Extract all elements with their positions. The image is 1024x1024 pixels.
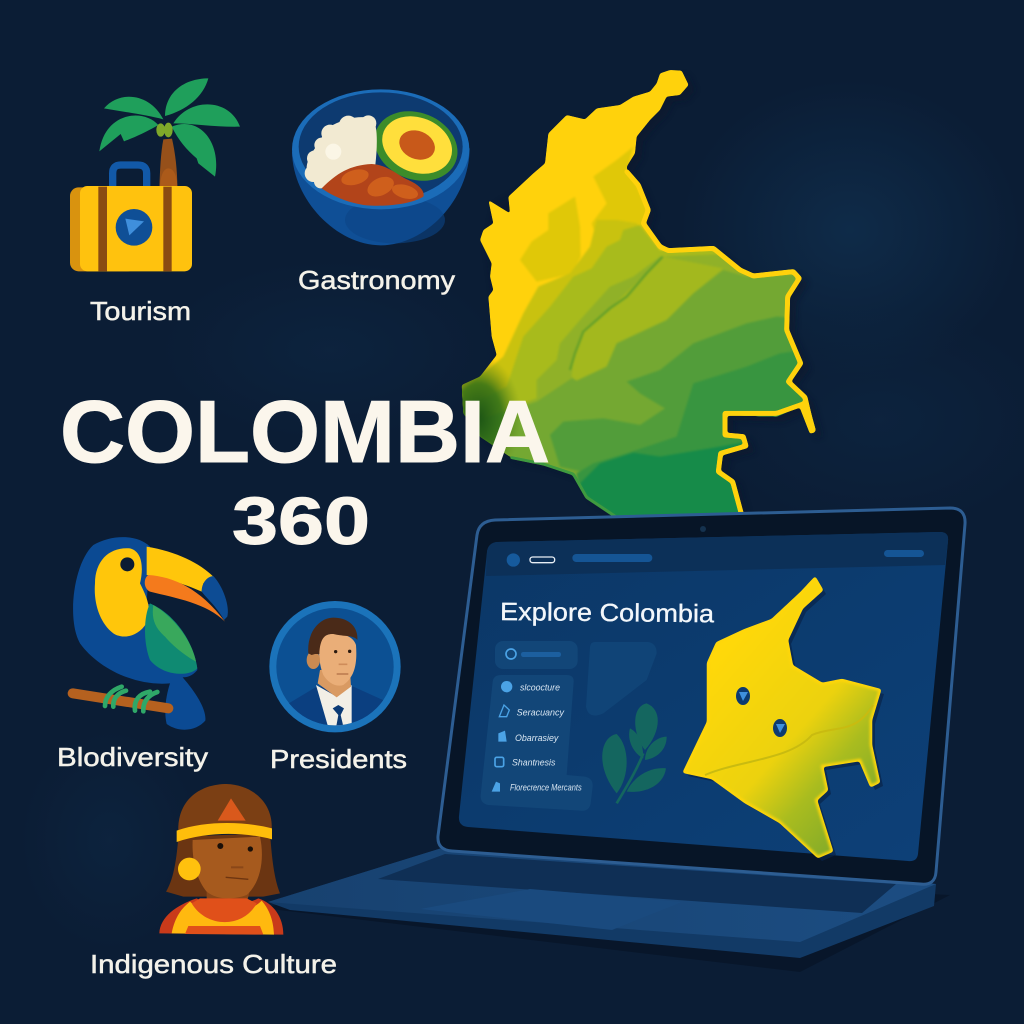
hair [166,833,280,897]
leaf decoration [602,703,667,803]
screen heading: Explore Colombia [500,598,714,628]
header bar [572,554,652,562]
shirt [316,685,352,726]
list labels: Florecrence Mercants [510,783,582,793]
icon: toucan [73,537,228,730]
claws [105,687,157,711]
list labels [510,682,582,793]
map pin [736,687,750,705]
mini map shadow [688,582,884,861]
map pin [773,719,787,737]
suitcase body [70,187,137,271]
camera [700,526,706,532]
laptop [262,508,965,972]
palm leaves [99,78,240,177]
mini map [684,578,884,861]
hair [308,618,357,655]
ear [306,654,320,669]
toucan beak [147,547,213,592]
list labels: Shantnesis [512,758,556,768]
suitcase straps [98,187,107,271]
title number: 360 [232,484,370,559]
eyes and mouth [217,843,253,852]
bowl body [292,148,470,245]
list labels: Seracuancy [517,708,564,718]
colombia map [462,70,816,516]
yellow southern tail [799,397,816,434]
icon: gastronomy bowl [292,89,470,245]
head [319,634,356,686]
rice [305,115,377,190]
icon: palm tree and suitcase [70,78,240,271]
header pill [530,557,555,563]
portrait ring [269,601,401,732]
neck [318,670,351,697]
label: indigenous culture: Indigenous Culture [90,949,337,979]
list labels: Obarrasiey [515,733,559,743]
earring [178,858,201,880]
suitcase handle [113,165,147,187]
toucan eye [120,557,134,571]
title word: COLOMBIA [60,382,550,481]
list icons [492,681,512,792]
beans [322,164,424,206]
faint panel [586,642,657,716]
branch [73,693,168,708]
laptop lid [438,508,965,884]
yellow eastern border [627,172,813,515]
icon: indigenous woman [159,784,283,935]
suit [289,686,383,726]
list labels: slcoocture [520,682,560,692]
infographic canvas [59,70,967,979]
mini map regions [705,705,873,775]
hat band [177,823,272,842]
title [60,382,550,559]
suitcase badge [116,209,152,246]
neck and face [207,890,250,903]
search icon and bar [506,649,561,659]
search box [495,641,578,669]
green pacific border [510,457,617,517]
trackpad [420,889,682,930]
screen header [486,532,948,576]
screen [459,532,948,861]
hat triangle [218,798,246,821]
bowl rim [292,89,469,209]
laptop shadow [262,870,950,972]
label: gastronomy: Gastronomy [298,265,455,295]
coconuts [156,123,173,137]
facial features [334,650,351,653]
hat [178,784,272,833]
avocado [364,99,468,193]
map shadow [468,75,822,522]
garment [159,898,283,935]
mini map fill [684,578,880,857]
label: tourism: Tourism [90,296,191,326]
tie [332,705,344,726]
header dot [507,553,520,567]
icon: president portrait [269,601,401,733]
toucan wing [145,603,197,674]
toucan body [73,537,205,730]
list panel [481,675,593,811]
toucan chest [95,548,149,637]
palm trunk [159,139,177,188]
laptop base [268,848,936,958]
map borders [510,172,816,517]
label: biodiversity: Blodiversity [57,742,208,772]
elevation bands [462,70,816,516]
top right header bar [884,550,924,557]
label: presidents: Presidents [270,744,407,774]
keyboard [378,854,896,913]
